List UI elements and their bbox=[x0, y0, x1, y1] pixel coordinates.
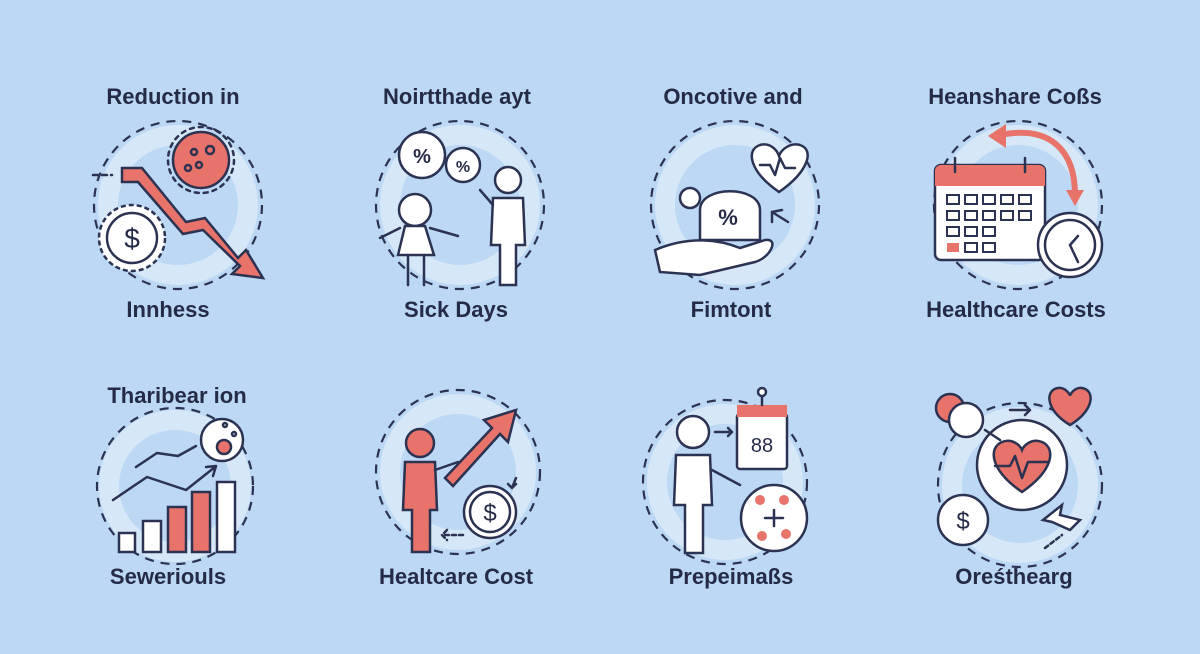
panel: overall health bbox=[936, 388, 1102, 589]
icon: percent badges: % bbox=[456, 159, 470, 176]
icon: clock bbox=[1038, 213, 1102, 277]
icon: device bbox=[737, 388, 787, 469]
label: Innhess: Innhess bbox=[126, 297, 210, 322]
label: Healtcare Cost bbox=[379, 564, 534, 589]
icon: gear dollar bbox=[99, 205, 165, 271]
icon: calendar bbox=[935, 158, 1045, 260]
panel: prevention bbox=[643, 388, 807, 589]
panel: severity bbox=[97, 383, 253, 589]
icon: hand with percent dome bbox=[655, 188, 788, 275]
icon: percent badges bbox=[399, 132, 480, 182]
panel: sick days bbox=[376, 84, 544, 322]
icon: bar chart bbox=[113, 446, 235, 552]
label: Sick Days bbox=[404, 297, 508, 322]
icon: person bbox=[403, 429, 458, 552]
panel: incentive bbox=[651, 84, 819, 322]
icon: coin and arrow bbox=[938, 495, 1080, 548]
icon: coin: $ bbox=[483, 500, 497, 527]
heading: Noirtthade ayt bbox=[383, 84, 532, 109]
icon: gear dollar: $ bbox=[124, 223, 140, 254]
icon: device: 88 bbox=[751, 435, 773, 457]
panel: reduction in illness bbox=[93, 84, 263, 322]
arrow: curved bbox=[988, 124, 1084, 206]
arrow: decline bbox=[93, 168, 263, 278]
label: Healthcare Costs bbox=[926, 297, 1106, 322]
icon: heart center bbox=[977, 420, 1067, 510]
label: Prepeimaßs bbox=[669, 564, 793, 589]
heading: Tharibear ion bbox=[107, 383, 247, 408]
icon: cell circle bbox=[741, 485, 807, 551]
icon: cell bbox=[201, 419, 243, 461]
heading: Heanshare Coßs bbox=[928, 84, 1102, 109]
label: Oreśthearg bbox=[955, 564, 1073, 589]
icon: hand with percent dome: % bbox=[718, 205, 738, 230]
arrow: up bbox=[445, 410, 516, 486]
icon: hearts bbox=[936, 388, 1091, 440]
icon: virus bbox=[168, 127, 234, 193]
icon: percent badges: % bbox=[413, 146, 431, 168]
label: Fimtont bbox=[691, 297, 772, 322]
icon: person bbox=[674, 416, 740, 553]
panel: healthcare costs bbox=[926, 84, 1106, 322]
heading: Reduction in: Reduction in bbox=[106, 84, 240, 109]
label: Seweriouls bbox=[110, 564, 226, 589]
heading: Oncotive and bbox=[663, 84, 803, 109]
icon: coin and arrow: $ bbox=[956, 508, 970, 535]
panel: healthcare cost growth bbox=[376, 390, 540, 589]
icon: heart bbox=[752, 144, 808, 192]
icon: people bbox=[380, 167, 525, 285]
icon: coin bbox=[442, 478, 516, 540]
